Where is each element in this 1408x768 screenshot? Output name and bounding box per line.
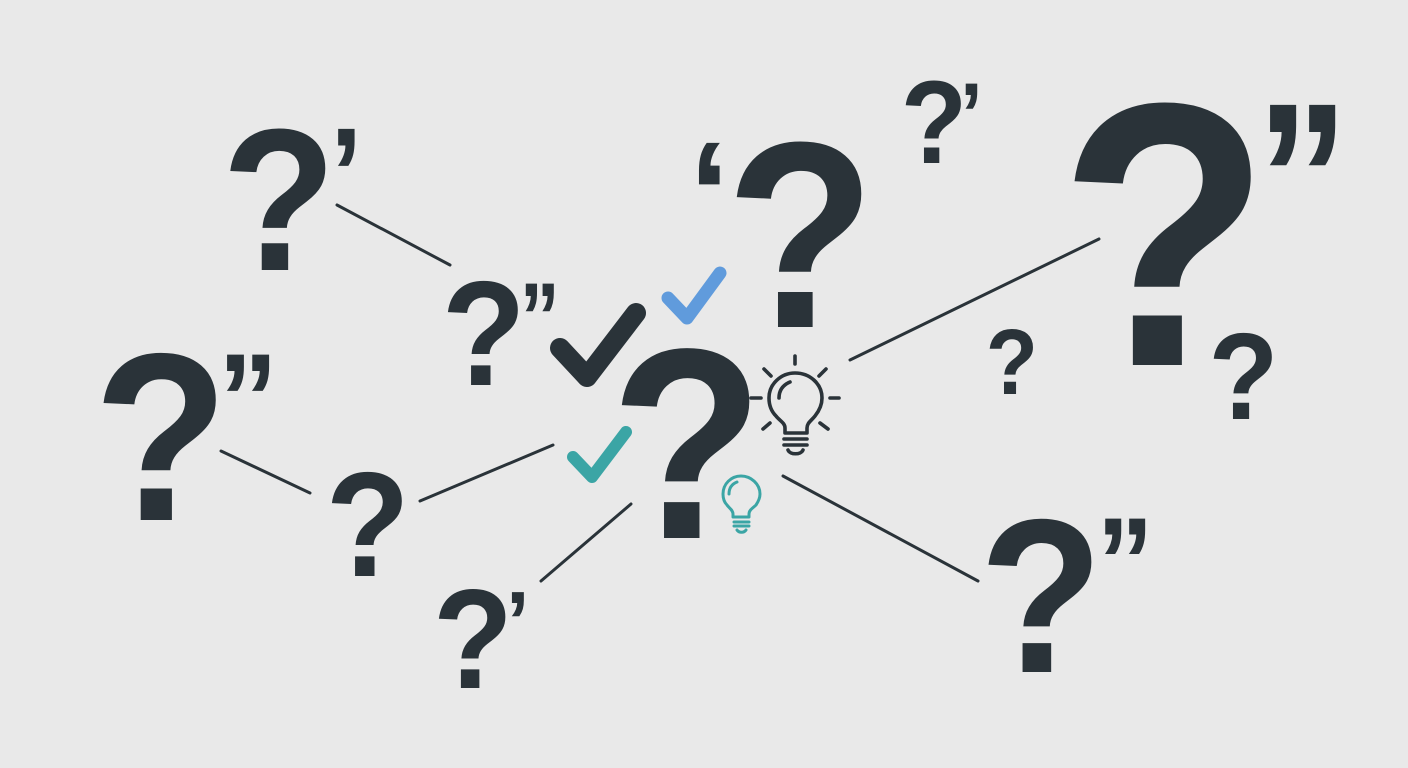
question mark: central: ? — [610, 293, 764, 596]
question mark: upper centre: ‘ — [689, 112, 730, 276]
connector lines — [221, 205, 1099, 581]
question mark: largest right: ” — [1256, 60, 1349, 298]
question mark: small centre left: ” — [520, 262, 560, 371]
question mark: tiny right: ? — [986, 310, 1038, 414]
icon: teal check mark — [573, 432, 626, 477]
question mark: bottom: ’ — [506, 575, 530, 670]
question mark: largest right: ? — [1059, 24, 1271, 445]
question mark: lower right: ” — [1097, 493, 1154, 632]
question mark: lower right: ? — [979, 474, 1103, 719]
icon: dark light bulb with rays — [751, 356, 839, 454]
question mark: small centre left: ? — [442, 251, 526, 417]
question mark: upper left: ’ — [330, 102, 363, 247]
question mark: large left: ? — [93, 303, 228, 571]
question mark: upper left: ? — [222, 87, 336, 314]
icon: blue check mark — [668, 273, 720, 318]
question mark: top small: ? — [901, 57, 967, 188]
question mark: lower left: ? — [326, 442, 410, 608]
question mark: top small: ’ — [960, 65, 983, 165]
question mark: small right: ? — [1208, 308, 1278, 446]
icon: teal light bulb — [723, 476, 760, 532]
icon: dark check mark — [560, 313, 636, 377]
question mark: upper centre: ? — [726, 87, 875, 384]
question mark: large left: ” — [218, 328, 278, 471]
question mark: bottom: ? — [433, 559, 513, 718]
